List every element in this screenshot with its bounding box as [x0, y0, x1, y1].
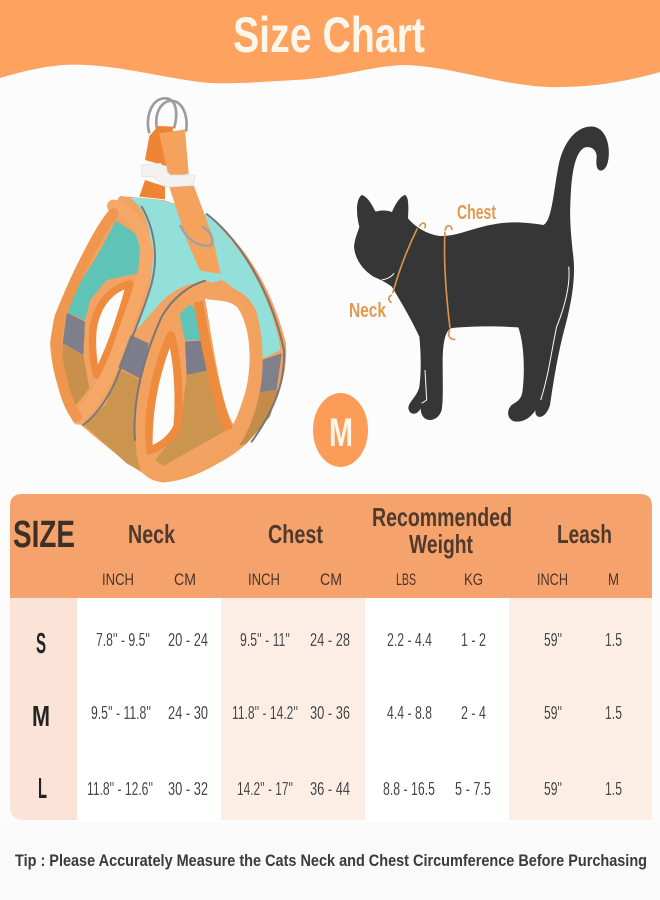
title: Size Chart — [233, 7, 425, 63]
table header: Chest — [268, 519, 323, 549]
row S: 7.8'' - 9.5'' — [96, 630, 150, 650]
row S: 1 - 2 — [461, 630, 486, 650]
row L: 36 - 44 — [310, 779, 350, 799]
table header: INCH — [248, 570, 280, 589]
size table — [10, 494, 652, 822]
row L: 8.8 - 16.5 — [383, 779, 435, 799]
row S — [36, 628, 622, 660]
table header — [10, 494, 652, 598]
d-ring — [180, 225, 212, 246]
table header: Neck — [128, 519, 175, 549]
row S: S — [36, 628, 46, 660]
harness photo — [50, 98, 286, 482]
row S: 1.5 — [605, 630, 622, 650]
back strap — [139, 126, 173, 199]
table header: Leash — [557, 519, 612, 549]
row S: 59'' — [544, 630, 562, 650]
row M: 11.8'' - 14.2'' — [232, 703, 298, 723]
table header: Weight — [409, 529, 473, 559]
table header: SIZE — [13, 514, 75, 556]
row S: 9.5'' - 11'' — [240, 630, 290, 650]
row S: 24 - 28 — [310, 630, 350, 650]
table header: Recommended — [372, 502, 512, 532]
table header: INCH — [537, 570, 568, 589]
harness rims — [57, 206, 284, 477]
row L: 11.8'' - 12.6'' — [87, 779, 153, 799]
table header: LBS — [396, 570, 416, 589]
harness openings — [93, 284, 250, 451]
inner strap — [198, 302, 228, 430]
title banner — [0, 0, 660, 87]
row L: 30 - 32 — [168, 779, 208, 799]
row M: 4.4 - 8.8 — [387, 703, 432, 723]
chest measuring line — [445, 226, 455, 339]
row L: L — [38, 773, 47, 805]
harness body — [50, 196, 286, 482]
front strap — [159, 129, 221, 274]
row S: 20 - 24 — [168, 630, 208, 650]
row M: 24 - 30 — [168, 703, 208, 723]
row M: 1.5 — [605, 703, 622, 723]
row M: 59'' — [544, 703, 562, 723]
cat silhouette — [354, 127, 609, 422]
buckle — [142, 163, 195, 187]
table header: INCH — [102, 570, 134, 589]
row M — [32, 701, 622, 733]
neck measuring line — [389, 223, 425, 303]
table header: CM — [174, 570, 196, 589]
row S: 2.2 - 4.4 — [387, 630, 432, 650]
size badge — [313, 393, 368, 467]
size badge: M — [329, 411, 353, 455]
row M: 9.5'' - 11.8'' — [91, 703, 151, 723]
table header: KG — [464, 570, 483, 589]
row L — [38, 773, 622, 805]
label: neck: Neck — [349, 300, 387, 322]
row L: 1.5 — [605, 779, 622, 799]
row L: 5 - 7.5 — [455, 779, 491, 799]
table body columns — [10, 598, 652, 822]
table header: M — [608, 570, 619, 589]
icon: metal rings — [148, 98, 187, 137]
row L: 59'' — [544, 779, 562, 799]
row M: 30 - 36 — [310, 703, 350, 723]
table header: CM — [320, 570, 342, 589]
row M: M — [32, 701, 50, 733]
row L: 14.2'' - 17'' — [237, 779, 293, 799]
label: chest: Chest — [457, 202, 496, 224]
row M: 2 - 4 — [461, 703, 486, 723]
